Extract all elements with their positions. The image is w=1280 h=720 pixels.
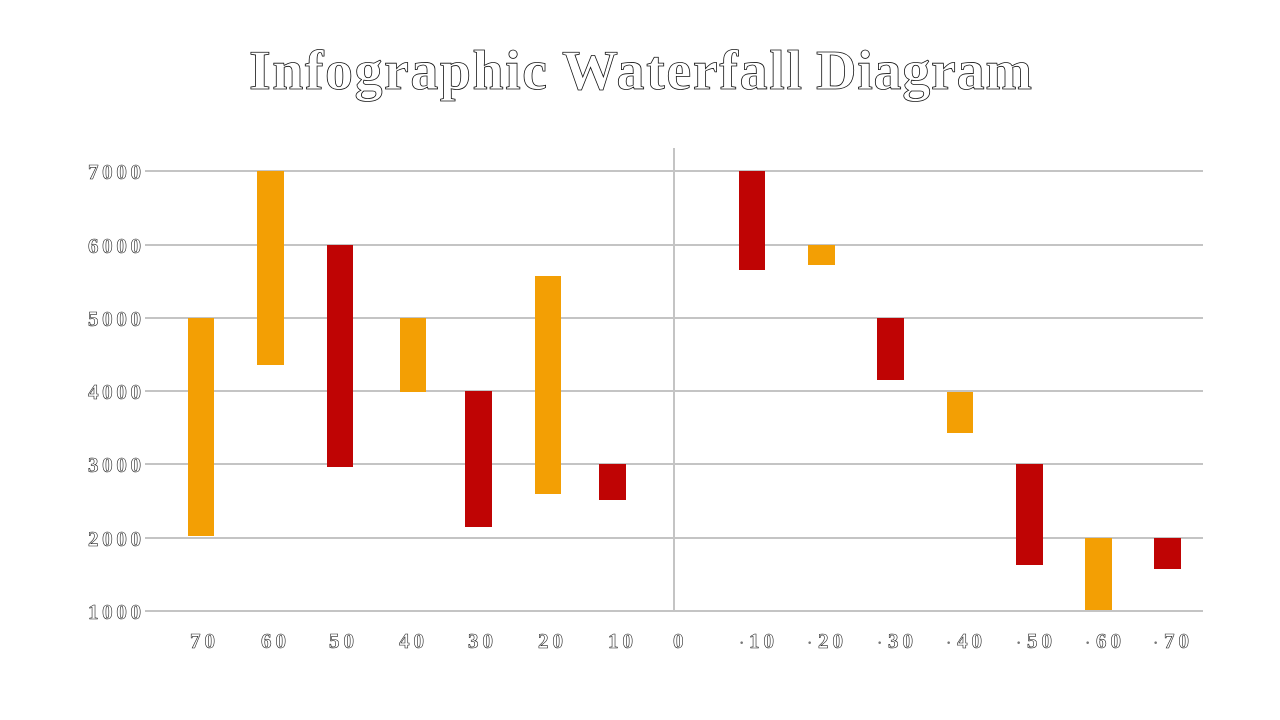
waterfall bars (188, 171, 1181, 610)
x axis labels: 10 (749, 629, 774, 653)
y axis labels: 1000 (88, 600, 141, 624)
x axis labels: 70 (190, 629, 215, 653)
y axis labels: 4000 (88, 380, 141, 404)
x axis labels: 30 (888, 629, 913, 653)
x axis labels: 50 (1027, 629, 1052, 653)
x axis labels: 20 (538, 629, 563, 653)
x axis labels: · (1153, 635, 1158, 652)
x axis labels: · (946, 635, 951, 652)
x axis labels: 0 (673, 629, 684, 653)
x axis labels: 20 (818, 629, 843, 653)
y axis labels: 3000 (88, 453, 141, 477)
x axis labels: · (739, 635, 744, 652)
x axis labels: 30 (468, 629, 493, 653)
title: Infographic (249, 40, 547, 102)
y axis labels: 7000 (88, 160, 141, 184)
x axis labels: 10 (608, 629, 633, 653)
x axis labels: 40 (399, 629, 424, 653)
x axis labels: 50 (329, 629, 354, 653)
x axis labels (190, 629, 1189, 653)
title (249, 40, 1032, 102)
x axis labels: 60 (261, 629, 286, 653)
x axis labels: 40 (957, 629, 982, 653)
x axis labels: · (807, 635, 812, 652)
x axis labels: 60 (1096, 629, 1121, 653)
y axis labels: 2000 (88, 527, 141, 551)
y axis labels (88, 160, 141, 624)
y axis labels: 5000 (88, 307, 141, 331)
x axis labels: · (1085, 635, 1090, 652)
x axis labels: 70 (1164, 629, 1189, 653)
title: Waterfall (562, 40, 802, 102)
x axis labels: · (1016, 635, 1021, 652)
y axis labels: 6000 (88, 234, 141, 258)
x axis labels: · (877, 635, 882, 652)
title: Diagram (816, 40, 1032, 102)
